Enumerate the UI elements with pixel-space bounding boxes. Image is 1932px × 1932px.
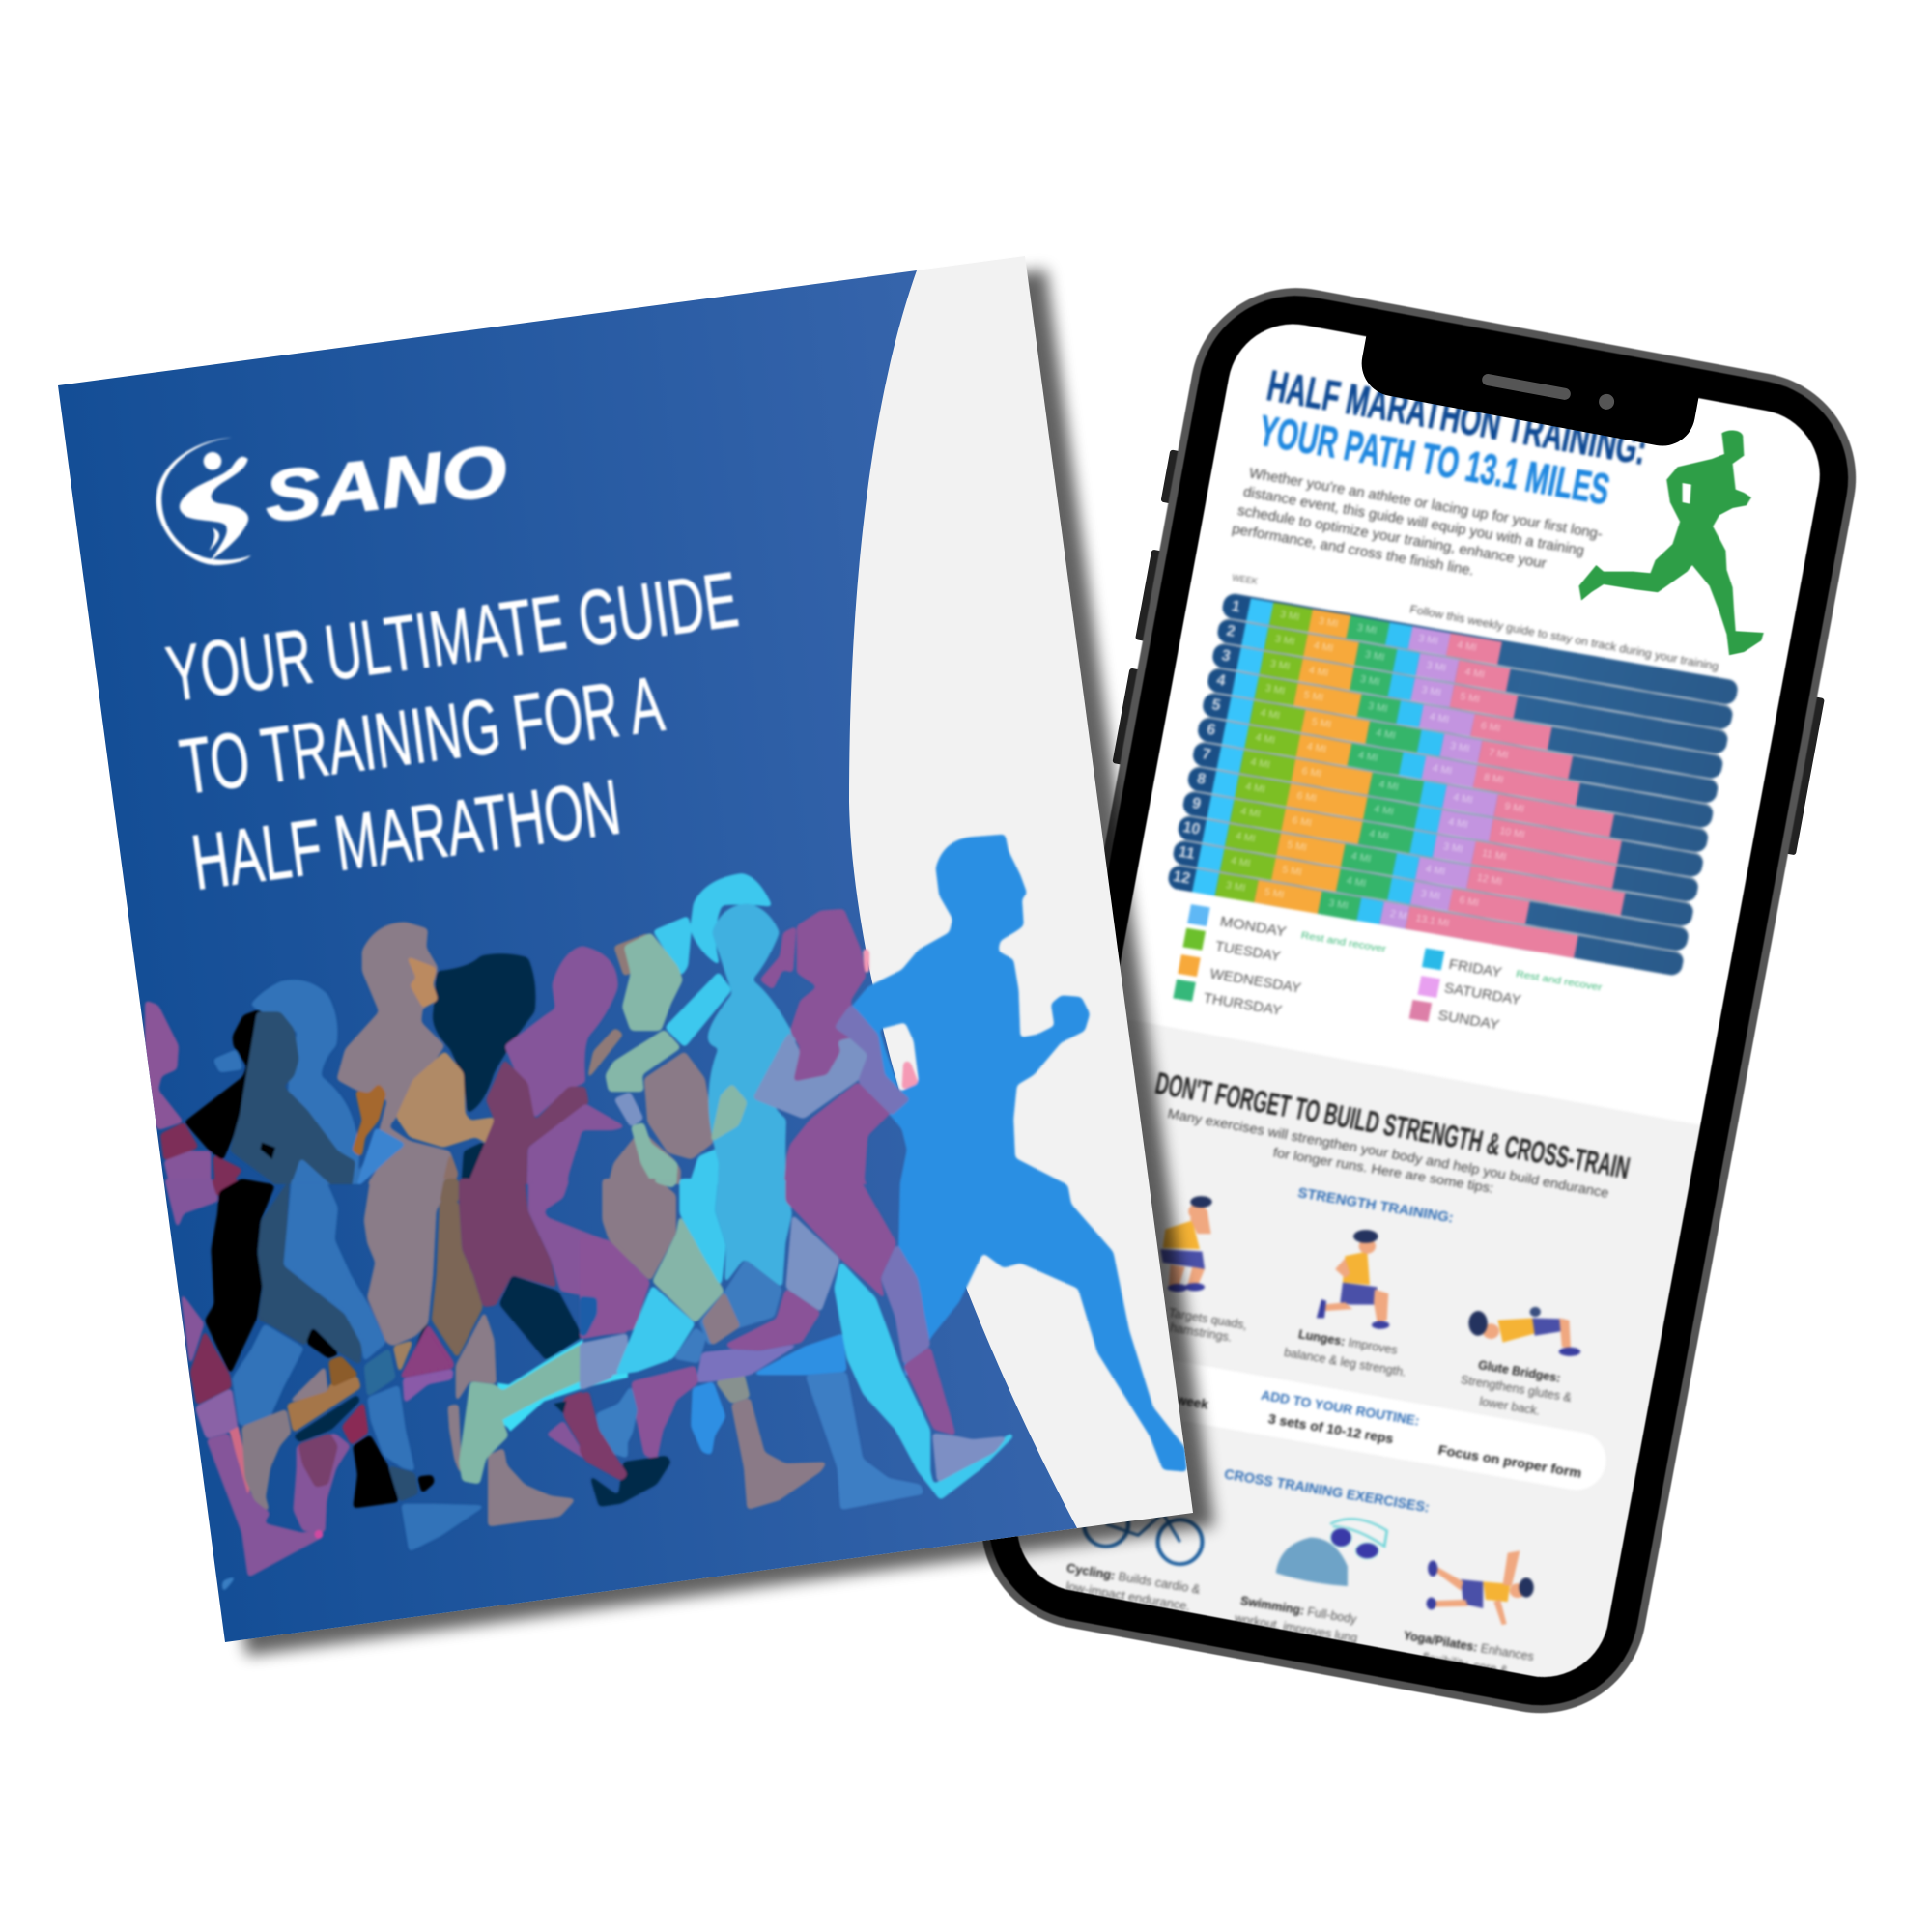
phone button: left middle xyxy=(1135,549,1164,641)
training chart row: week 10 xyxy=(1177,813,1695,927)
training chart row: week 9: 4 MI xyxy=(1369,828,1390,842)
training chart row: week 4: 3 MI xyxy=(1368,700,1389,715)
training chart row: week 6: 6 xyxy=(1206,722,1217,739)
training chart row: week 1: 3 MI xyxy=(1318,615,1340,630)
training chart row: week 4: 4 MI xyxy=(1429,711,1451,725)
training chart row: week 4: 5 MI xyxy=(1303,689,1324,703)
training chart row: week 11: 3 MI xyxy=(1420,888,1441,902)
illustration: glute bridge xyxy=(1469,1307,1581,1356)
training chart row: week 9 xyxy=(1181,789,1700,902)
training chart row: week 1: 3 MI xyxy=(1418,633,1439,647)
training chart row: week 3: 4 MI xyxy=(1308,665,1330,679)
strength captions: Glute Bridges: xyxy=(1477,1358,1562,1385)
cover title: HALF MARATHON xyxy=(186,764,625,907)
training chart row: week 9: 6 MI xyxy=(1292,814,1313,829)
training chart row: week 8: 6 MI xyxy=(1296,789,1318,805)
intro paragraph: distance event, this guide will equip you with a training xyxy=(1242,483,1586,559)
legend swatches and labels: SUNDAY xyxy=(1437,1007,1501,1034)
illustration: lunge xyxy=(1317,1230,1390,1329)
training chart row: week 9: 4 MI xyxy=(1240,806,1262,820)
mint overlap shapes xyxy=(605,932,748,1190)
phone body xyxy=(964,270,1874,1730)
training chart row: week 1: 3 MI xyxy=(1356,622,1378,637)
training chart row: week 8 xyxy=(1186,764,1705,878)
lower legs right section xyxy=(580,1179,1014,1510)
training chart row: week 7: 7 xyxy=(1201,746,1212,763)
legend swatches and labels: Rest and recover xyxy=(1516,969,1604,994)
training chart row: week 5: 3 MI xyxy=(1450,740,1471,754)
strength training heading: STRENGTH TRAINING: xyxy=(1296,1184,1455,1226)
training chart row: week 12 xyxy=(1167,863,1686,977)
screen content page xyxy=(1024,360,1740,1678)
illustration: cycling xyxy=(1084,1502,1203,1564)
training chart row: week 12: 3 MI xyxy=(1328,897,1350,912)
black silhouette runner xyxy=(184,1009,287,1375)
cross training captions xyxy=(1060,1561,1538,1682)
routine tips xyxy=(1145,1369,1588,1481)
legend swatches and labels xyxy=(1173,904,1605,1069)
training chart row: week 1: 1 xyxy=(1231,598,1242,615)
training chart row: week 7: 4 MI xyxy=(1453,791,1474,806)
routine tips: Focus on proper form xyxy=(1437,1442,1583,1481)
strength captions: balance & leg strength. xyxy=(1283,1346,1407,1379)
cover booklet and overlays xyxy=(58,256,1765,1665)
cross training captions: low-impact endurance. xyxy=(1065,1579,1192,1613)
training chart row: week 2: 3 MI xyxy=(1274,633,1296,648)
training chart row: week 11 xyxy=(1172,838,1690,952)
training chart row: week 4: 3 MI xyxy=(1264,682,1287,697)
training chart row: week 5: 4 MI xyxy=(1260,707,1281,722)
cover title xyxy=(161,556,743,907)
training chart row: week 12: 2 MI xyxy=(1389,908,1411,923)
notch speaker xyxy=(1482,373,1572,401)
training chart row: week 3 xyxy=(1211,641,1730,754)
legend swatches and labels: MONDAY xyxy=(1219,913,1288,940)
second tan runner xyxy=(586,932,714,1278)
training chart row: week 10: 4 MI xyxy=(1236,830,1257,844)
training chart row: week 5 xyxy=(1202,691,1720,804)
strength captions xyxy=(1114,1298,1577,1423)
training chart row: week 8: 8 xyxy=(1196,771,1208,788)
logo mark xyxy=(156,438,251,565)
weekly training chart xyxy=(1167,591,1740,978)
phone notch xyxy=(1356,328,1700,451)
training chart row: week 8: 4 MI xyxy=(1245,781,1266,795)
training chart row: week 2 xyxy=(1216,616,1735,730)
training chart row: week 2: 4 MI xyxy=(1313,639,1335,654)
training chart row: week 11: 11 xyxy=(1178,843,1197,863)
training chart row: week 7: 9 MI xyxy=(1504,800,1525,815)
navy silhouette runner xyxy=(433,953,536,1198)
running crowd illustration xyxy=(145,835,1187,1594)
purple male runner xyxy=(468,945,624,1185)
training chart row: week 7: 4 MI xyxy=(1250,756,1271,771)
intro paragraph: schedule to optimize your training, enhance your xyxy=(1236,502,1548,572)
training chart row: week 11: 6 MI xyxy=(1459,895,1480,909)
strength captions: lower back. xyxy=(1479,1395,1542,1418)
training chart row: week 6: 4 MI xyxy=(1432,762,1454,777)
cross training captions: flexibility, core & xyxy=(1422,1650,1510,1678)
upper bodies of the crowd xyxy=(145,873,919,1401)
phone button: left upper xyxy=(1161,449,1182,504)
training chart row: week 6 xyxy=(1196,715,1716,829)
notch camera xyxy=(1598,392,1616,411)
cover title: YOUR ULTIMATE GUIDE xyxy=(161,556,743,719)
intro paragraph: performance, and cross the finish line. xyxy=(1231,521,1476,579)
training chart row: week 6: 4 MI xyxy=(1306,740,1328,755)
cross training heading: CROSS TRAINING EXERCISES: xyxy=(1223,1465,1432,1516)
tan male runner xyxy=(336,921,495,1184)
training chart row: week 5: 7 MI xyxy=(1488,747,1510,761)
strength captions: Squats: Targets quads, xyxy=(1122,1298,1249,1332)
training chart row: week 12: 5 MI xyxy=(1264,886,1286,900)
training chart row: week 11: 5 MI xyxy=(1282,864,1303,878)
illustration: yoga figure xyxy=(1427,1550,1534,1625)
training chart row: week 7 xyxy=(1191,740,1710,853)
phone screen xyxy=(1007,313,1831,1688)
cover title: TO TRAINING FOR A xyxy=(175,661,668,811)
intro paragraph: Whether you're an athlete or lacing up for your first long- xyxy=(1248,465,1605,543)
training chart row: week 11: 4 MI xyxy=(1346,875,1368,890)
phone button: left lower xyxy=(1113,668,1142,765)
purple female runner xyxy=(613,909,919,1309)
training chart row: week 1: 3 MI xyxy=(1279,609,1301,623)
training chart row: week 8: 4 MI xyxy=(1374,803,1395,818)
training chart row: week 2: 3 MI xyxy=(1364,648,1386,664)
training chart row: week 10: 4 MI xyxy=(1350,850,1373,865)
guide note: Follow this weekly guide to stay on track during your training xyxy=(1409,602,1720,673)
intro paragraph xyxy=(1231,464,1605,599)
training chart row: week 5: 5 MI xyxy=(1311,716,1333,730)
illustration: squat xyxy=(1161,1196,1212,1292)
training chart row: week 7: 4 MI xyxy=(1378,779,1400,793)
training chart row: week 7: 6 MI xyxy=(1301,765,1322,780)
training chart row: week 9: 9 xyxy=(1191,795,1203,812)
training chart row: week 10: 5 MI xyxy=(1287,838,1308,854)
training chart row: week 12: 3 MI xyxy=(1225,879,1247,894)
grey lower panel xyxy=(882,998,1833,1820)
training chart row: week 3: 3 MI xyxy=(1359,673,1381,688)
cross training captions: Swimming: Full-body xyxy=(1239,1594,1359,1627)
training chart row: week 9: 3 MI xyxy=(1442,840,1464,855)
cross training captions: Yoga/Pilates: Enhances xyxy=(1403,1629,1535,1663)
cross training captions: workout, improves lung xyxy=(1233,1611,1359,1645)
week axis label: WEEK xyxy=(1232,573,1259,586)
legend swatches and labels: Rest and recover xyxy=(1300,930,1388,955)
legend swatches and labels: FRIDAY xyxy=(1448,956,1503,980)
cross training captions: Cycling: Builds cardio & xyxy=(1065,1561,1203,1597)
legend swatches and labels: THURSDAY xyxy=(1203,990,1284,1019)
training chart row: week 9: 11 MI xyxy=(1481,847,1508,863)
routine tips: ADD TO YOUR ROUTINE: xyxy=(1260,1387,1421,1428)
training chart row: week 10: 12 MI xyxy=(1476,872,1503,888)
green runner silhouette xyxy=(1578,431,1764,655)
training chart row: week 2: 4 MI xyxy=(1464,666,1486,681)
white routine pill xyxy=(1093,1348,1611,1494)
exercise illustrations xyxy=(1084,1196,1581,1625)
lower legs left section xyxy=(164,1179,628,1594)
training chart row: week 6: 4 MI xyxy=(1255,731,1276,746)
training chart row: week 5: 4 MI xyxy=(1376,727,1397,742)
screen text and illustrations xyxy=(1024,360,1728,1678)
legend swatches and labels: TUESDAY xyxy=(1214,938,1282,965)
training chart row: week 12: 13.1 MI xyxy=(1415,912,1451,929)
training chart row: week 3: 3 MI xyxy=(1421,684,1442,698)
training chart row: week 2: 2 xyxy=(1226,623,1237,640)
illustration: swimming goggles and dome xyxy=(1276,1519,1387,1586)
big blue runner xyxy=(832,835,1187,1472)
cover blue panel xyxy=(58,270,1077,1642)
cyan female runner xyxy=(652,873,797,1305)
training chart row: week 5: 5 xyxy=(1210,696,1222,714)
routine tips: 2-3x/week xyxy=(1147,1387,1210,1412)
training chart row: week 1 xyxy=(1221,592,1740,705)
training chart row: week 1: 4 MI xyxy=(1457,639,1478,654)
far-left purple runner xyxy=(145,1000,243,1229)
strength captions: glutes, hamstrings. xyxy=(1131,1315,1234,1345)
training chart row: week 3: 3 xyxy=(1220,647,1233,665)
phone mockup xyxy=(156,287,1857,1714)
strength intro: Many exercises will strengthen your body and help you build endurance xyxy=(1167,1105,1611,1201)
training chart row: week 12: 12 xyxy=(1172,868,1192,888)
blue female runner xyxy=(213,980,393,1401)
phone button: right xyxy=(1784,696,1825,855)
cover drop shadow xyxy=(79,270,1214,1656)
training chart row: week 10: 10 xyxy=(1181,819,1202,838)
training chart row: week 2: 3 MI xyxy=(1426,659,1447,674)
SANO logo xyxy=(156,430,511,565)
training chart row: week 3: 5 MI xyxy=(1460,691,1481,705)
heading line 2: YOUR PATH TO 13.1 MILES xyxy=(1255,406,1614,514)
training chart row: week 10: 4 MI xyxy=(1425,863,1447,878)
training chart row: week 11: 4 MI xyxy=(1230,855,1252,869)
training chart row: week 8: 10 MI xyxy=(1499,825,1526,840)
logo wordmark: SANO xyxy=(260,430,511,537)
strength intro: for longer runs. Here are some tips: xyxy=(1272,1144,1495,1196)
legend swatches and labels: WEDNESDAY xyxy=(1209,965,1303,997)
strength captions: Strengthens glutes & xyxy=(1460,1373,1574,1405)
training chart row: week 8: 4 MI xyxy=(1448,816,1469,831)
strength captions: Lunges: Improves xyxy=(1297,1327,1399,1357)
routine tips: 3 sets of 10-12 reps xyxy=(1267,1411,1395,1446)
training chart row: week 6: 4 MI xyxy=(1357,750,1379,764)
legend swatches and labels: SATURDAY xyxy=(1443,980,1522,1009)
cover paper xyxy=(58,256,1193,1642)
training chart row: week 3: 3 MI xyxy=(1269,658,1292,672)
training chart row: week 6: 8 MI xyxy=(1483,771,1505,786)
training chart row: week 4 xyxy=(1207,666,1725,780)
training chart row: week 4: 4 xyxy=(1215,672,1227,690)
training chart row: week 4: 6 MI xyxy=(1480,720,1502,734)
